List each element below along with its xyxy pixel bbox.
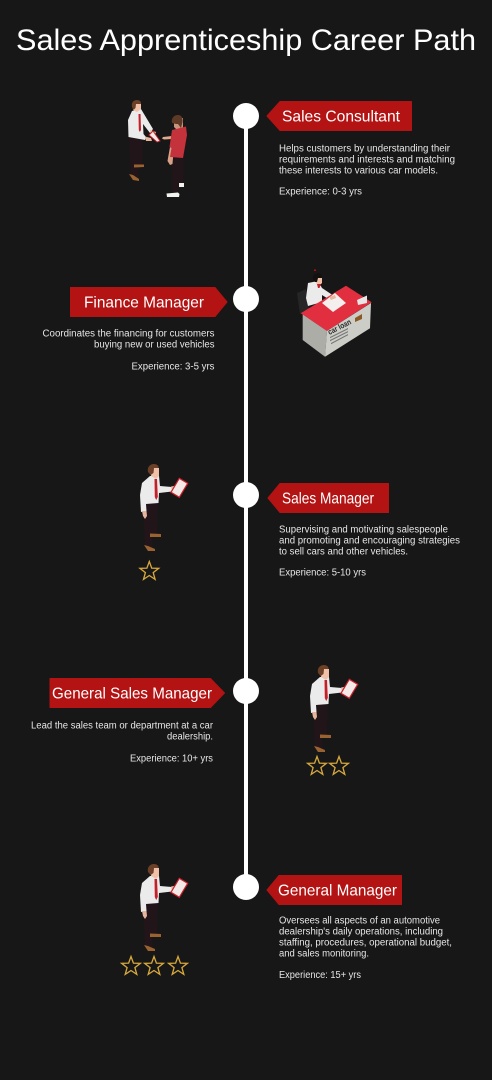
timeline (233, 103, 259, 900)
description: Supervising and motivating salespeople (279, 524, 448, 536)
icon: salesperson with clipboard (310, 665, 358, 752)
description: these interests to various car models. (279, 166, 438, 176)
description: Experience: 0-3 yrs (279, 186, 362, 198)
description: Experience: 15+ yrs (279, 970, 361, 981)
description: Experience: 5-10 yrs (279, 568, 366, 578)
description: Helps customers by understanding their (279, 144, 451, 154)
description (279, 144, 455, 198)
panel: Sales Manager (140, 464, 460, 579)
description: Experience: 10+ yrs (130, 754, 213, 764)
description: and sales monitoring. (279, 948, 369, 960)
icon: one star (140, 562, 159, 579)
heading banner (70, 288, 227, 316)
description: Oversees all aspects of an automotive (279, 916, 440, 926)
heading banner: Sales Manager (282, 490, 375, 508)
heading banner: Sales Consultant (282, 108, 401, 126)
icon: salesman shaking hands with customer (128, 100, 187, 197)
description: Coordinates the financing for customers (42, 328, 214, 340)
description: dealership. (167, 732, 213, 742)
heading banner (267, 876, 402, 904)
heading banner: Finance Manager (84, 294, 205, 312)
icon: finance manager at car loan desk: car loan (326, 317, 353, 337)
heading banner (268, 484, 388, 512)
description (42, 328, 214, 372)
description: dealership's daily operations, including (279, 926, 443, 938)
icon: two stars (308, 756, 348, 774)
description (279, 916, 452, 981)
heading banner: General Sales Manager (52, 686, 213, 702)
panel: General Manager (122, 864, 452, 981)
panel: General Sales Manager (31, 665, 358, 774)
description (279, 524, 460, 578)
description: requirements and interests and matching (279, 154, 455, 166)
description (31, 720, 214, 764)
description: Experience: 3-5 yrs (132, 362, 214, 372)
description: and promoting and encouraging strategies (279, 536, 460, 546)
title: Sales Apprenticeship Career Path (16, 24, 476, 57)
description: Lead the sales team or department at a car (31, 720, 214, 732)
description: to sell cars and other vehicles. (279, 546, 408, 558)
heading banner: General Manager (278, 882, 398, 900)
icon: salesperson with clipboard (140, 464, 188, 551)
icon: finance manager at car loan desk (297, 270, 372, 357)
icon: salesperson with clipboard (140, 864, 188, 951)
heading banner (267, 102, 412, 130)
description: buying new or used vehicles (94, 340, 214, 350)
icon: three stars (122, 956, 187, 974)
panel: Finance Manager (42, 270, 372, 372)
heading banner (50, 678, 224, 708)
description: staffing, procedures, operational budget, (279, 938, 452, 948)
panel: Sales Consultant (128, 100, 455, 198)
